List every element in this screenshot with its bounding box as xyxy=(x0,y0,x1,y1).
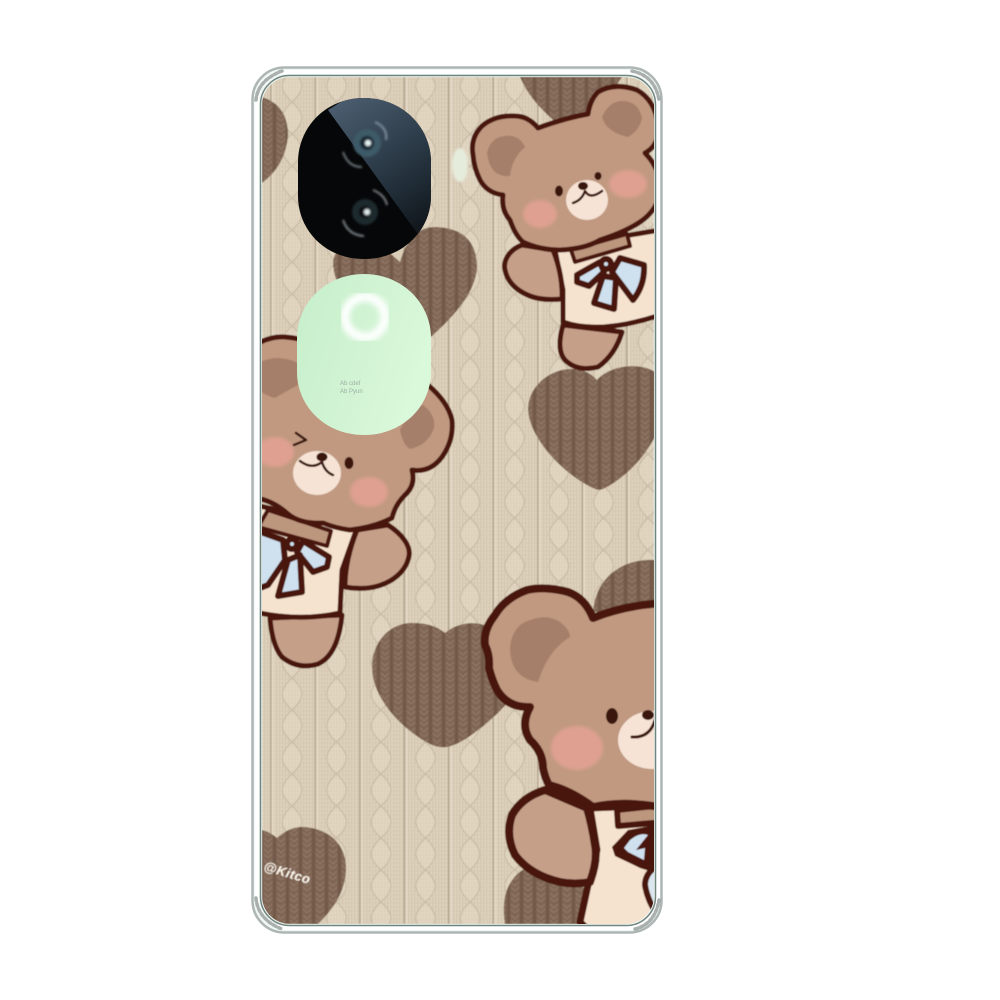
collar xyxy=(571,234,630,262)
heart: upper right of big bear xyxy=(593,560,655,612)
bear: top right xyxy=(472,86,660,368)
watermark: @Kitco xyxy=(262,859,313,887)
camera module xyxy=(298,90,435,262)
corner sparkle xyxy=(256,71,659,929)
heart: lower centre xyxy=(372,623,520,747)
face xyxy=(294,433,354,475)
heart: bottom right xyxy=(504,867,590,924)
ring light xyxy=(345,297,385,337)
bow xyxy=(255,530,329,596)
arm xyxy=(509,790,596,884)
inner ears xyxy=(487,101,642,176)
blush xyxy=(256,437,294,467)
glass reflection xyxy=(328,90,435,262)
bow knot outline xyxy=(612,825,654,871)
heart: right xyxy=(528,366,655,490)
bear: bottom right xyxy=(480,584,654,924)
collar xyxy=(614,808,654,830)
tiny label: Ab cdef xyxy=(340,381,361,387)
lens top xyxy=(343,122,386,167)
printed case back xyxy=(255,77,686,932)
bow xyxy=(577,258,644,309)
tiny label second line: Ab Pyun xyxy=(340,389,363,395)
heart: centre behind camera xyxy=(332,226,478,338)
iridescent reflection xyxy=(452,148,468,182)
muzzle xyxy=(293,451,341,495)
bear: middle left xyxy=(255,337,452,666)
muzzle xyxy=(566,180,608,220)
bow ribbon xyxy=(624,834,648,860)
heart: top left xyxy=(262,97,288,183)
knit background xyxy=(262,77,654,924)
heart: bottom left xyxy=(262,827,346,924)
blush right xyxy=(609,170,647,198)
inner ear xyxy=(510,617,570,682)
shirt xyxy=(555,230,660,327)
arm xyxy=(345,525,409,588)
face xyxy=(555,172,602,203)
blush right xyxy=(350,477,388,507)
bow xyxy=(612,825,654,910)
blush xyxy=(523,200,557,228)
shirt xyxy=(255,505,357,617)
blush xyxy=(551,726,603,770)
collar xyxy=(258,510,331,546)
phone case frame xyxy=(252,68,662,932)
head xyxy=(485,588,665,808)
inner ears xyxy=(255,358,434,449)
arm xyxy=(505,245,562,300)
head xyxy=(255,337,452,530)
lens bottom xyxy=(343,190,387,236)
leg xyxy=(270,615,342,666)
head xyxy=(472,86,660,250)
bow tail xyxy=(645,862,665,925)
mint oval module xyxy=(297,274,431,435)
heart: top behind bear xyxy=(520,77,622,122)
muzzle xyxy=(618,711,686,769)
face xyxy=(606,708,655,737)
shirt xyxy=(576,807,650,924)
leg xyxy=(560,325,622,368)
